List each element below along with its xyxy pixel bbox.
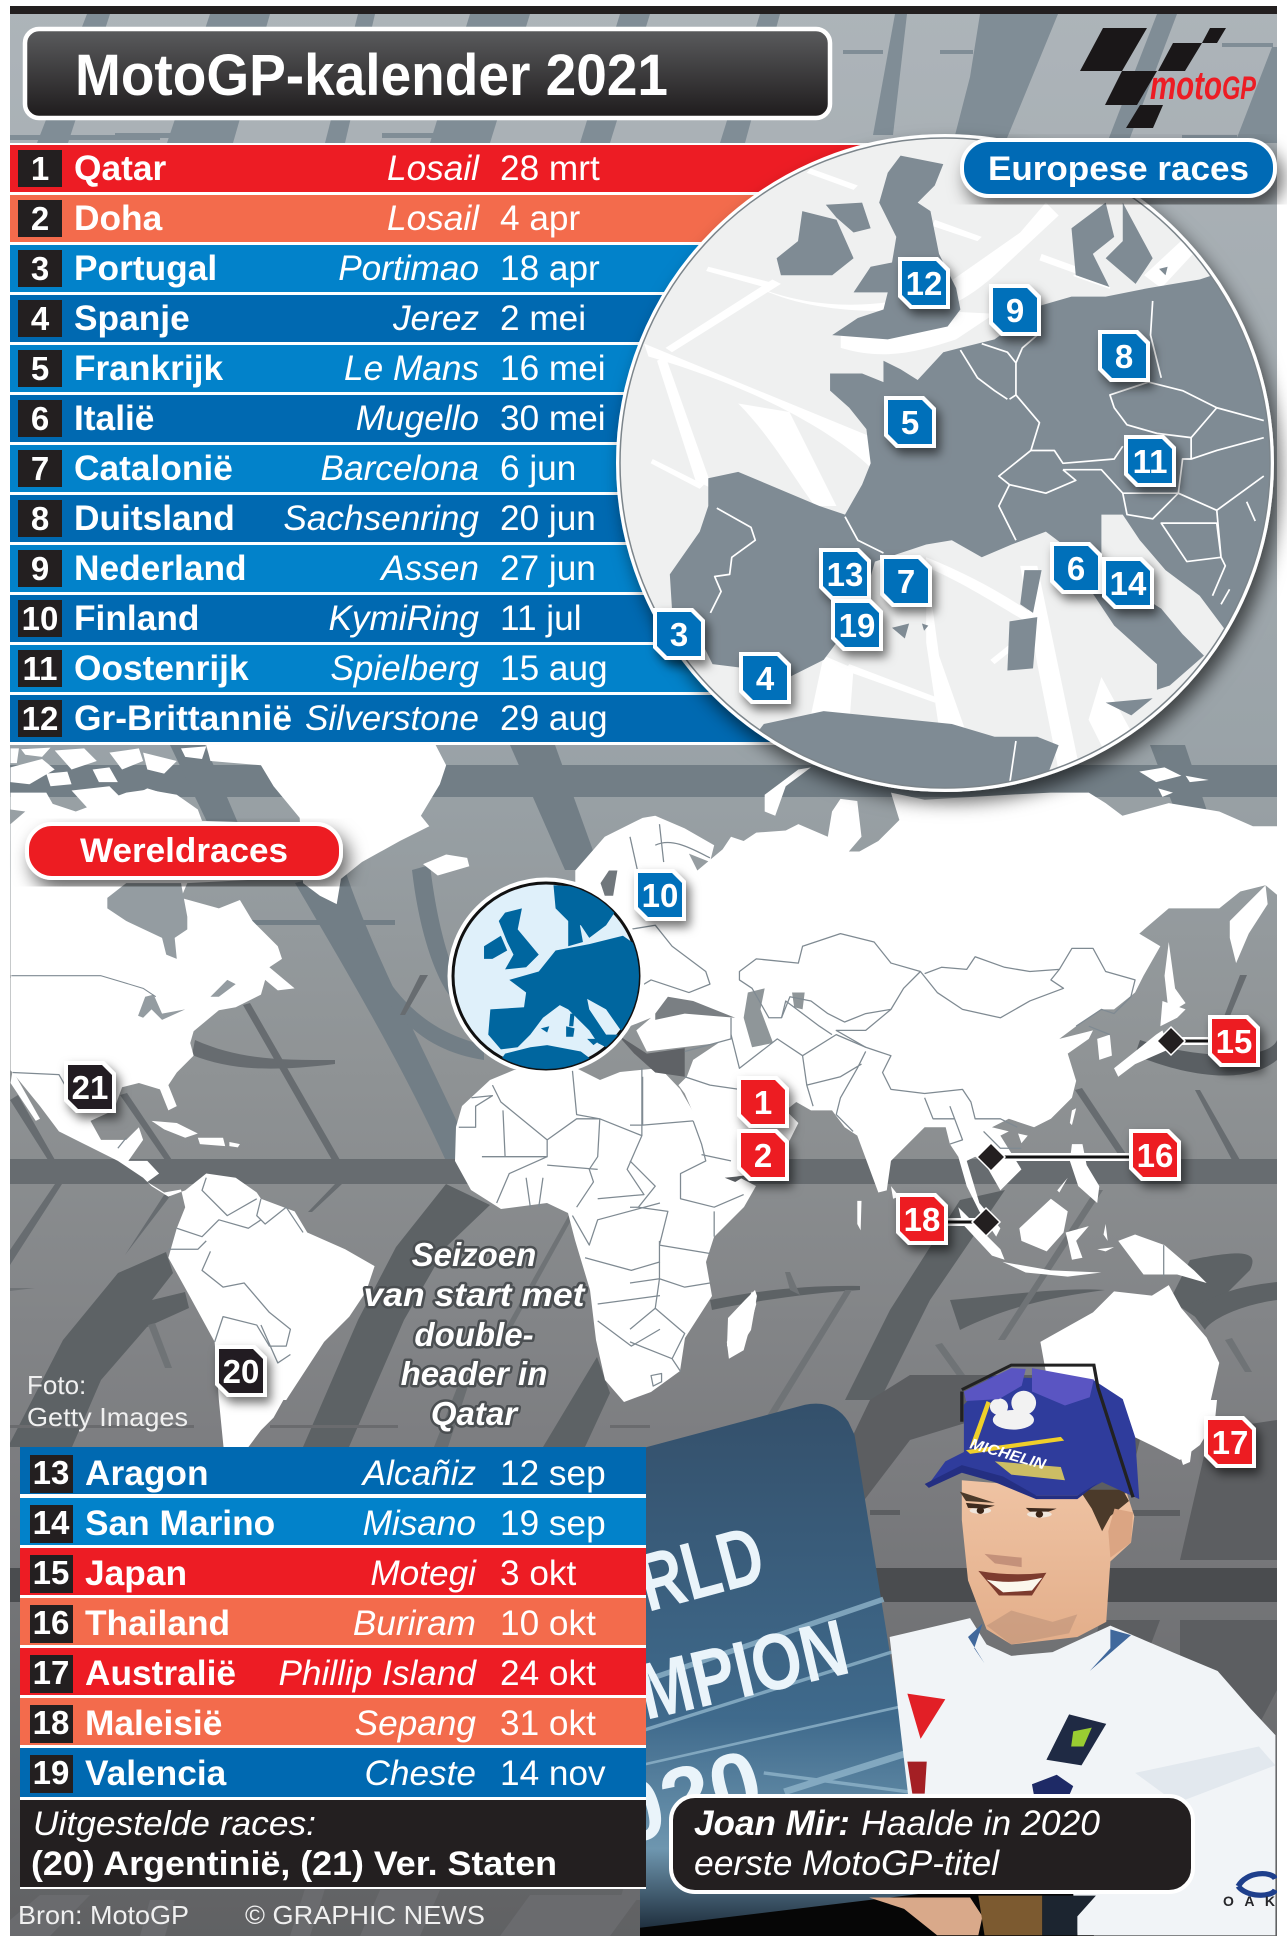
marker 8: 8	[1115, 338, 1133, 375]
marker 2	[737, 1129, 789, 1181]
row 18 Maleisie	[20, 1698, 646, 1745]
callout: season start: double-	[414, 1316, 534, 1353]
marker 3: 3	[670, 616, 688, 653]
row 5 Frankrijk: 16 mei	[500, 349, 606, 388]
caption: Joan Mir: eerste MotoGP-titel	[694, 1844, 1000, 1883]
row 14 San Marino: Misano	[363, 1504, 476, 1543]
Europe map circle	[618, 136, 1287, 814]
row 10 Finland: Finland	[74, 599, 200, 638]
row 19 Valencia: Cheste	[364, 1754, 476, 1793]
row 6 Italie	[10, 395, 945, 442]
cap and sponsor lettering: OAK	[1223, 1893, 1275, 1909]
marker 8	[1098, 330, 1150, 382]
row 10 Finland: KymiRing	[328, 599, 479, 638]
row 7 Catalonie: Barcelona	[321, 449, 479, 488]
Americas, Greenland and Arctic	[11, 745, 469, 1464]
title bar: MotoGP-kalender 2021	[75, 43, 668, 108]
marker 6	[1050, 542, 1102, 594]
row 11 Oostenrijk: Oostenrijk	[74, 649, 249, 688]
row 6 Italie: 30 mei	[500, 399, 606, 438]
row 4 Spanje: Jerez	[392, 299, 479, 338]
MotoGP logo	[1080, 28, 1256, 128]
MotoGP logo: motoGP	[1150, 64, 1256, 108]
Africa	[455, 1068, 756, 1402]
row 6 Italie: Italië	[74, 399, 154, 438]
row 5 Frankrijk: Le Mans	[344, 349, 479, 388]
caption: Joan Mir: Joan Mir:	[694, 1804, 850, 1843]
row 17 Australie: Australië	[85, 1654, 236, 1693]
photo: Joan Mir with championship board	[601, 1365, 1275, 1942]
row 19 Valencia: 14 nov	[500, 1754, 606, 1793]
marker 20: 20	[223, 1353, 259, 1390]
row 3 Portugal: Portimao	[338, 249, 479, 288]
row 17 Australie: Phillip Island	[278, 1654, 477, 1693]
row 19 Valencia	[20, 1748, 646, 1797]
marker 17	[1204, 1416, 1256, 1468]
board lettering: MPION	[630, 1602, 856, 1737]
marker 12	[898, 257, 950, 309]
connector: race 18	[945, 1208, 1000, 1236]
marker 15	[1208, 1015, 1260, 1067]
source line: © GRAPHIC NEWS	[245, 1900, 485, 1930]
Tasmania	[1178, 1447, 1192, 1465]
marker 21: 21	[72, 1069, 108, 1106]
label: Europese races	[962, 140, 1275, 196]
row 18 Maleisie: 31 okt	[500, 1704, 596, 1743]
row 1 Qatar: Losail	[387, 149, 480, 188]
marker 11	[1124, 435, 1176, 487]
marker 14: 14	[1110, 565, 1147, 602]
Eurasia and islands	[575, 767, 1278, 1400]
cap and sponsor lettering: MICHELIN	[968, 1436, 1049, 1474]
row 11 Oostenrijk: Spielberg	[330, 649, 479, 688]
row 16 Thailand: Buriram	[353, 1604, 476, 1643]
marker 2: 2	[754, 1137, 772, 1174]
row 16 Thailand: 16	[33, 1604, 69, 1641]
row 19 Valencia: Valencia	[85, 1754, 227, 1793]
row 11 Oostenrijk	[10, 645, 945, 692]
marker 13: 13	[827, 556, 863, 593]
callout: season start: Seizoen	[412, 1236, 536, 1273]
inland seas	[601, 870, 805, 1182]
marker 17: 17	[1212, 1424, 1248, 1461]
Australia lower part	[1040, 1400, 1217, 1460]
row 10 Finland	[10, 595, 945, 642]
row 16 Thailand	[20, 1598, 646, 1645]
row 11 Oostenrijk: 15 aug	[500, 649, 608, 688]
callout: season start: Qatar	[431, 1395, 519, 1432]
inset globe: Europe locator	[451, 881, 644, 1077]
row 4 Spanje	[10, 295, 945, 342]
row 1 Qatar	[10, 145, 945, 192]
row 13 Aragon: Aragon	[85, 1454, 209, 1493]
row 4 Spanje: 2 mei	[500, 299, 586, 338]
marker 10: 10	[642, 877, 678, 914]
marker 18: 18	[904, 1201, 940, 1238]
postponed races: Uitgestelde races:	[33, 1805, 316, 1843]
row 16 Thailand: 10 okt	[500, 1604, 596, 1643]
row 14 San Marino: 19 sep	[500, 1504, 606, 1543]
marker 19: 19	[839, 607, 875, 644]
row 2 Doha	[10, 195, 945, 242]
row 14 San Marino: 14	[33, 1504, 70, 1541]
photo credit: Foto:	[27, 1370, 86, 1400]
label: Wereldraces: Wereldraces	[80, 832, 288, 870]
label: Europese races: Europese races	[988, 150, 1249, 188]
row 8 Duitsland: 20 jun	[500, 499, 596, 538]
row 9 Nederland	[10, 545, 945, 592]
row 5 Frankrijk: 5	[31, 350, 49, 387]
marker 7	[880, 555, 932, 607]
row 8 Duitsland	[10, 495, 945, 542]
cap and sponsor lettering	[968, 1436, 1275, 1909]
row 2 Doha: 2	[31, 200, 49, 237]
row 12 Gr-Brittannie	[10, 695, 945, 742]
callout: season start	[364, 1236, 587, 1432]
row 15 Japan: 3 okt	[500, 1554, 577, 1593]
row 14 San Marino: San Marino	[85, 1504, 275, 1543]
row 10 Finland: 11 jul	[500, 599, 582, 638]
row 14 San Marino	[20, 1498, 646, 1545]
Hudson Bay and Great Lakes	[107, 883, 236, 1020]
country borders	[11, 976, 660, 1363]
row 18 Maleisie: Maleisië	[85, 1704, 222, 1743]
marker 4: 4	[756, 660, 775, 697]
row 7 Catalonie: 6 jun	[500, 449, 576, 488]
row 10 Finland: 10	[22, 600, 58, 637]
row 1 Qatar: Qatar	[74, 149, 166, 188]
row 17 Australie	[20, 1648, 646, 1695]
row 2 Doha: 4 apr	[500, 199, 580, 238]
marker 4	[739, 652, 791, 704]
row 3 Portugal: Portugal	[74, 249, 217, 288]
marker 14	[1102, 557, 1154, 609]
marker 9	[989, 284, 1041, 336]
row 2 Doha: Losail	[387, 199, 480, 238]
row 4 Spanje: 4	[31, 300, 50, 337]
row 19 Valencia: 19	[33, 1754, 69, 1791]
row 1 Qatar: 1	[31, 150, 49, 187]
postponed races	[20, 1800, 646, 1887]
Madagascar	[727, 1290, 757, 1355]
source line: Bron: MotoGP	[18, 1900, 189, 1930]
callout: season start: header in	[401, 1355, 547, 1392]
row 12 Gr-Brittannie: Silverstone	[305, 699, 479, 738]
row 7 Catalonie: Catalonië	[74, 449, 233, 488]
row 6 Italie: 6	[31, 400, 49, 437]
row 9 Nederland: 27 jun	[500, 549, 596, 588]
marker 1: 1	[754, 1084, 772, 1121]
marker 10	[634, 869, 686, 921]
row 12 Gr-Brittannie: 12	[22, 700, 58, 737]
caption: Joan Mir	[671, 1796, 1193, 1892]
row 13 Aragon: Alcañiz	[361, 1454, 476, 1493]
board lettering: 020	[601, 1730, 772, 1864]
marker 18	[896, 1193, 948, 1245]
row 9 Nederland: 9	[31, 550, 49, 587]
race markers on the maps	[64, 257, 1260, 1468]
row 12 Gr-Brittannie: 29 aug	[500, 699, 608, 738]
marker 15: 15	[1216, 1023, 1252, 1060]
row 9 Nederland: Nederland	[74, 549, 247, 588]
row 13 Aragon	[20, 1447, 646, 1494]
marker 3	[653, 608, 705, 660]
marker 16	[1129, 1129, 1181, 1181]
marker 13	[819, 548, 871, 600]
connector: race 16	[977, 1143, 1135, 1171]
row 2 Doha: Doha	[74, 199, 163, 238]
marker 20	[215, 1345, 267, 1397]
connector: race 15	[1157, 1027, 1210, 1055]
marker 5	[884, 396, 936, 448]
marker 16: 16	[1137, 1137, 1173, 1174]
label: Wereldraces	[27, 824, 341, 878]
row 9 Nederland: Assen	[379, 549, 479, 588]
row 15 Japan: 15	[33, 1554, 69, 1591]
race table 13-19	[20, 1447, 646, 1889]
row 15 Japan: Japan	[85, 1554, 187, 1593]
row 7 Catalonie	[10, 445, 945, 492]
marker 7: 7	[897, 563, 915, 600]
row 8 Duitsland: Duitsland	[74, 499, 235, 538]
row 3 Portugal: 3	[31, 250, 49, 287]
row 4 Spanje: Spanje	[74, 299, 190, 338]
row 8 Duitsland: 8	[31, 500, 49, 537]
row 8 Duitsland: Sachsenring	[283, 499, 479, 538]
row 1 Qatar: 28 mrt	[500, 149, 600, 188]
marker 21	[64, 1061, 116, 1113]
title bar	[25, 29, 830, 118]
row 13 Aragon: 12 sep	[500, 1454, 606, 1493]
marker 6: 6	[1067, 550, 1085, 587]
row 15 Japan: Motegi	[370, 1554, 477, 1593]
row 5 Frankrijk: Frankrijk	[74, 349, 223, 388]
row 7 Catalonie: 7	[31, 450, 49, 487]
row 12 Gr-Brittannie: Gr-Brittannië	[74, 699, 292, 738]
row 13 Aragon: 13	[33, 1454, 69, 1491]
row 11 Oostenrijk: 11	[23, 650, 57, 687]
marker 9: 9	[1006, 292, 1024, 329]
photo credit	[27, 1370, 188, 1432]
callout: season start: van start met	[364, 1276, 587, 1313]
row 18 Maleisie: 18	[33, 1704, 69, 1741]
postponed races: (20) Argentinië, (21) Ver. Staten	[31, 1845, 557, 1883]
marker 5: 5	[901, 404, 919, 441]
row 15 Japan	[20, 1548, 646, 1595]
row 3 Portugal: 18 apr	[500, 249, 600, 288]
world map	[11, 745, 1278, 1465]
board lettering	[646, 1530, 848, 1840]
row 16 Thailand: Thailand	[85, 1604, 230, 1643]
marker 12: 12	[906, 265, 942, 302]
caption: Joan Mir: Haalde in 2020	[861, 1804, 1101, 1843]
source line	[18, 1900, 485, 1930]
photo credit: Getty Images	[27, 1402, 188, 1432]
row 17 Australie: 17	[33, 1654, 69, 1691]
row 3 Portugal	[10, 245, 945, 292]
row 18 Maleisie: Sepang	[355, 1704, 476, 1743]
marker 11: 11	[1133, 443, 1167, 480]
row 5 Frankrijk	[10, 345, 945, 392]
row 17 Australie: 24 okt	[500, 1654, 596, 1693]
marker 1	[737, 1076, 789, 1128]
race table 1-12	[10, 143, 945, 745]
marker 19	[831, 599, 883, 651]
row 6 Italie: Mugello	[356, 399, 479, 438]
board lettering: RLD	[629, 1509, 773, 1629]
